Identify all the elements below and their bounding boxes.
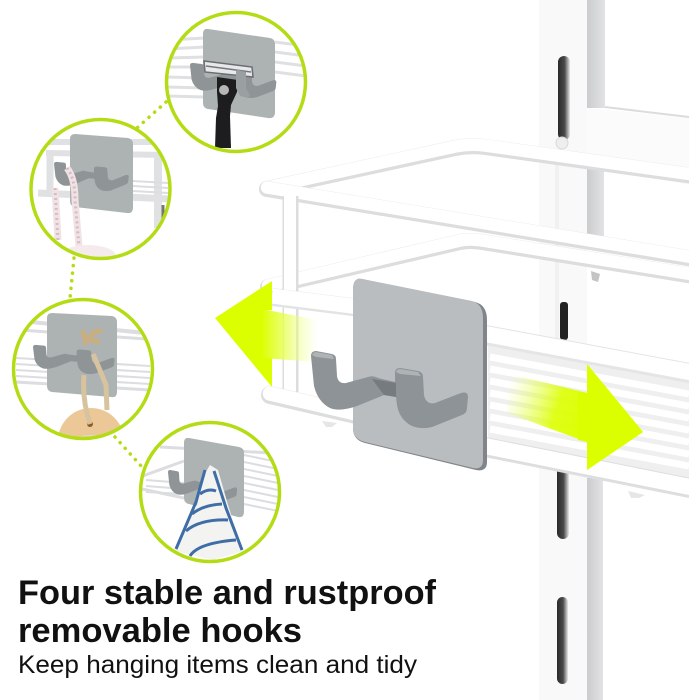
arrow: right direction	[507, 364, 643, 470]
hook highlights	[312, 352, 421, 376]
basket wire frame	[267, 145, 700, 416]
main grey hook	[311, 279, 487, 470]
wire shelf slats	[322, 333, 700, 498]
plate	[184, 438, 244, 517]
razor head	[204, 61, 253, 77]
front bottom rail left	[270, 395, 360, 416]
callout: wooden brush on hook	[12, 298, 154, 440]
plate	[203, 29, 275, 118]
rack	[38, 142, 170, 228]
rope	[84, 354, 107, 424]
callout: rope loofah on hook	[30, 118, 172, 267]
front rails right	[480, 333, 700, 490]
arrow: left direction	[215, 281, 318, 387]
rail stripes	[166, 38, 306, 97]
wooden ball	[59, 408, 120, 437]
plate	[70, 134, 133, 213]
hook	[168, 470, 237, 502]
front upper rail left	[272, 297, 360, 308]
towel	[175, 465, 243, 560]
callout: razor on hook	[160, 10, 310, 155]
razor handle	[215, 77, 238, 148]
lower back rail	[268, 241, 700, 287]
upper front rail	[267, 189, 700, 260]
callout: striped towel on hook	[138, 420, 282, 564]
dotted connectors	[70, 102, 166, 467]
rack	[140, 447, 278, 511]
loofah	[68, 245, 116, 257]
plate	[47, 313, 117, 397]
right hook front	[236, 70, 250, 98]
heading: Four stable and rustproof	[18, 574, 437, 612]
vertical post left	[282, 196, 298, 392]
rack	[16, 321, 150, 390]
rope	[55, 168, 79, 246]
hook arm	[372, 379, 396, 397]
hook body	[311, 351, 468, 428]
heading	[18, 574, 437, 650]
hooks	[33, 344, 114, 374]
heading: removable hooks	[18, 612, 302, 650]
subheading: Keep hanging items clean and tidy	[18, 651, 418, 679]
upper back rail	[267, 146, 700, 189]
hook plate	[353, 279, 487, 470]
hooks	[190, 62, 276, 98]
hooks	[54, 162, 129, 191]
rack post	[539, 0, 689, 700]
